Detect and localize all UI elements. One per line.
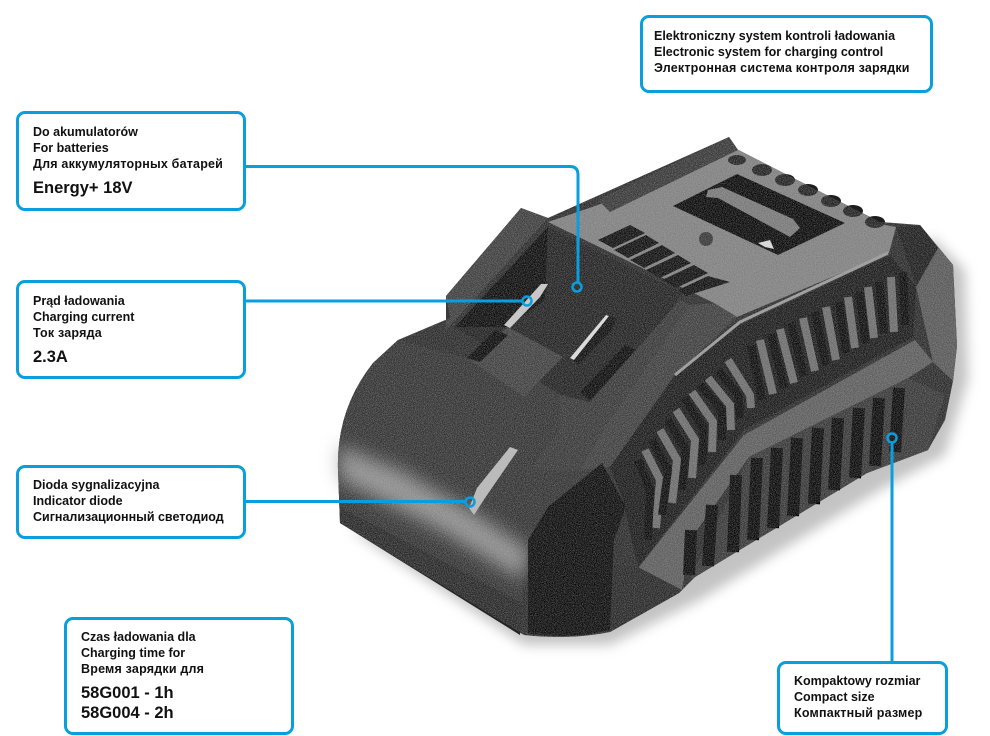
callout: charging control: Электронная система контроля зарядки (654, 61, 910, 75)
callout: for batteries: Для аккумуляторных батарей (33, 157, 223, 171)
lower slot (580, 345, 636, 400)
callout: charging time: 58G001 - 1h (81, 684, 174, 702)
socket (446, 208, 737, 470)
screw (699, 232, 713, 246)
callout: charging time: 58G004 - 2h (81, 704, 174, 722)
callout: charging time: Czas ładowania dla (81, 630, 196, 644)
lower fins (689, 378, 945, 578)
callout: charging current (16, 280, 246, 379)
callout: charging current: Prąd ładowania (33, 294, 125, 308)
side rim band (635, 340, 933, 590)
callout: compact size: Compact size (794, 690, 875, 704)
right end block (896, 225, 957, 381)
contact left (504, 284, 548, 328)
contact right (570, 315, 616, 365)
connector: compact size (888, 434, 896, 661)
silhouette base (338, 137, 957, 637)
ridges row (728, 155, 885, 228)
charger product illustration (246, 137, 974, 661)
front housing (338, 310, 720, 635)
callout: charging current: Charging current (33, 310, 134, 324)
callout: indicator diode: Indicator diode (33, 494, 123, 508)
lower trim (340, 507, 522, 635)
callout: indicator diode: Dioda sygnalizacyjna (33, 478, 159, 492)
callout: for batteries: For batteries (33, 141, 109, 155)
indicator diode (469, 447, 518, 515)
top surface (548, 145, 896, 317)
black front corner pillar (528, 463, 626, 636)
callout: charging control (640, 15, 933, 93)
drop shadow (350, 235, 968, 645)
charger body (338, 137, 957, 637)
vents (598, 225, 730, 296)
back rim (598, 137, 738, 212)
callout: compact size: Компактный размер (794, 706, 922, 720)
front highlight (338, 445, 530, 580)
callout: for batteries: Energy+ 18V (33, 179, 133, 197)
upper fin panel (610, 253, 916, 567)
callout: for batteries: Do akumulatorów (33, 125, 138, 139)
socket slot (467, 330, 508, 362)
connector: indicator diode (246, 498, 474, 506)
callout: charging current: 2.3A (33, 348, 68, 366)
connector: batteries (246, 166, 582, 292)
callout: charging time: Время зарядки для (81, 662, 204, 676)
connector: charging current (246, 296, 532, 306)
cover plate (467, 327, 563, 397)
callout: charging control: Elektroniczny system kontroli ładowania (654, 29, 895, 43)
callout: indicator diode: Сигнализационный светодиод (33, 510, 224, 524)
lower right base (610, 565, 682, 632)
slope wall (580, 303, 737, 470)
callout: charging control: Electronic system for charging control (654, 45, 883, 59)
callout: compact size: Kompaktowy rozmiar (794, 674, 920, 688)
label plate (673, 174, 845, 255)
callout: indicator diode (16, 465, 246, 539)
callout: charging time: Charging time for (81, 646, 185, 660)
noise texture (330, 130, 965, 645)
callout: charging time (64, 617, 294, 735)
callout: for batteries (16, 111, 246, 211)
callout: compact size (777, 661, 948, 735)
callout: charging current: Ток заряда (33, 326, 102, 340)
